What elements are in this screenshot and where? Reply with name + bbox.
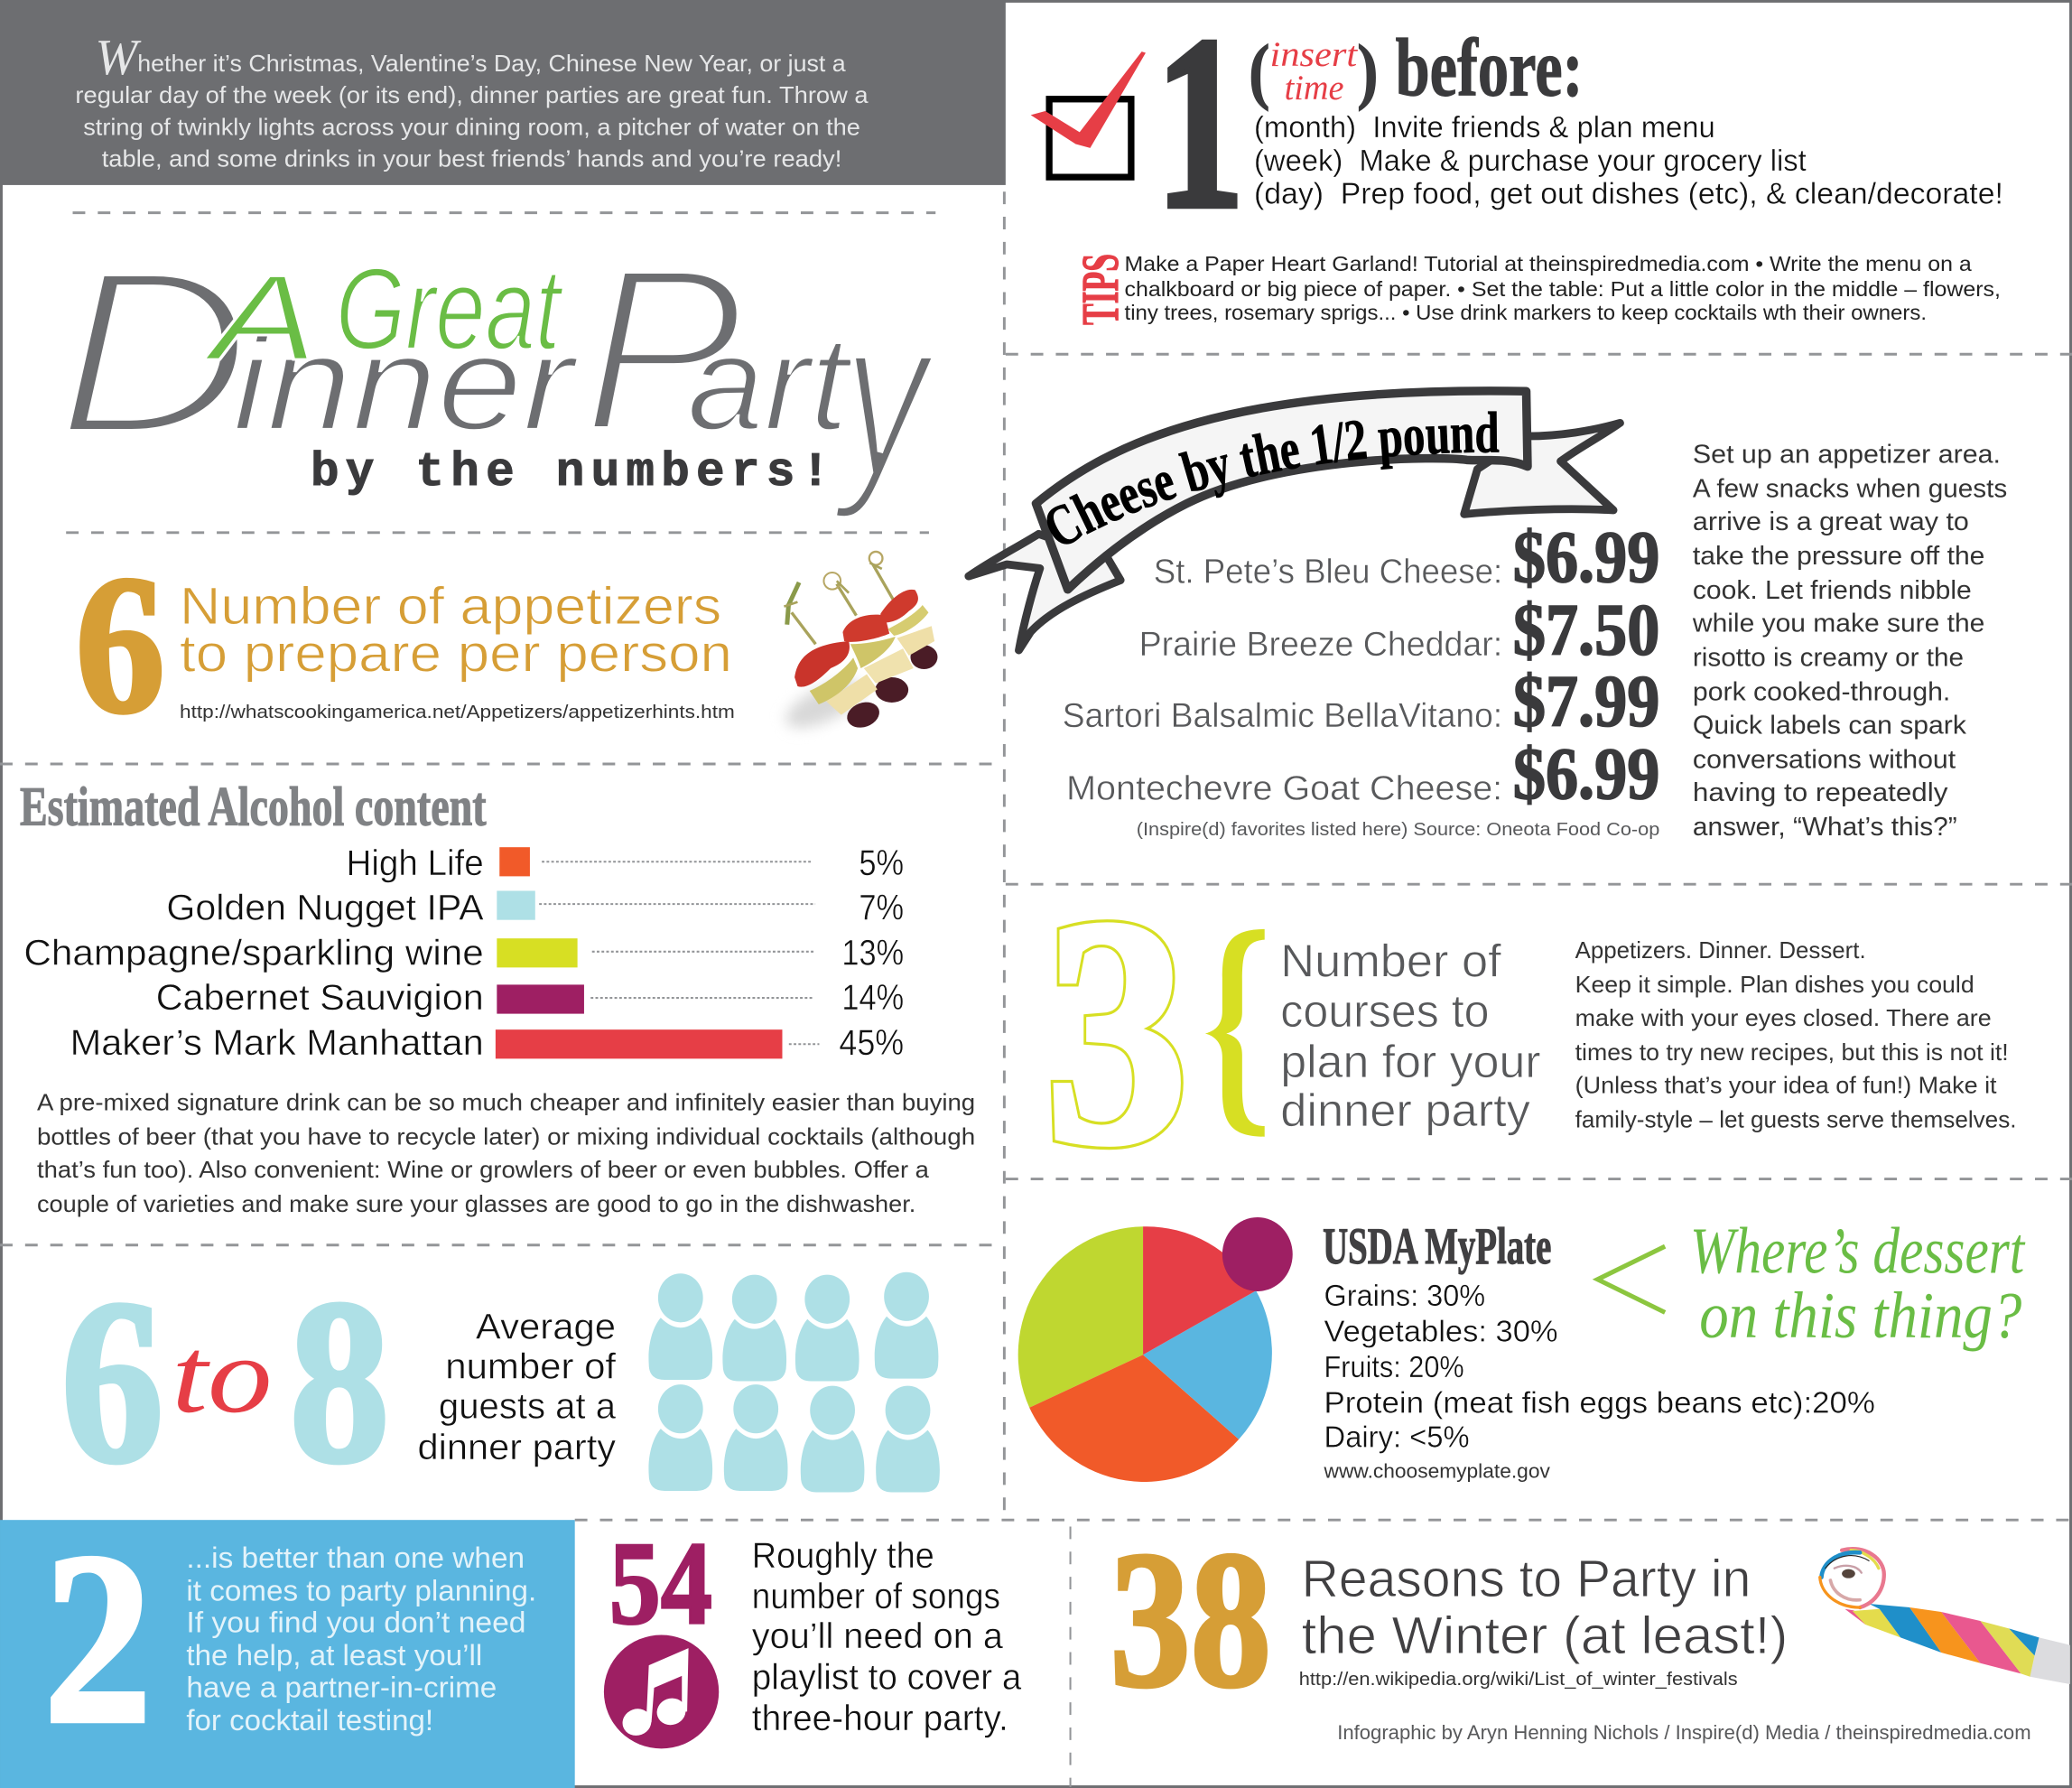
chart: estimated alcohol content: Cabernet Sauvigion (156, 978, 484, 1018)
panel: tips (1071, 252, 2001, 325)
panel: timeline: ( (1249, 29, 1270, 111)
stat: 6 to 8 guests: Average (476, 1308, 616, 1347)
stat: 3 courses: Number of (1280, 936, 1501, 987)
stat: 3 courses: 3 (1045, 851, 1188, 1211)
icon: checkbox (1031, 51, 1146, 177)
title: by the numbers! (311, 445, 830, 499)
text: appetizer area (1692, 440, 2007, 842)
list: cheese prices: St. Pete’s Bleu Cheese: (1154, 553, 1502, 591)
panel: 2 is better than one: ...is better than one when (186, 1541, 525, 1574)
panel: timeline: ) (1357, 29, 1379, 111)
stat: 38 reasons: Reasons to Party in (1302, 1550, 1751, 1608)
panel: myplate text: Vegetables: 30% (1324, 1316, 1558, 1349)
panel: tips: chalkboard or big piece of paper. • Set the table: Put a little color in the middle – flowers, (1125, 277, 2001, 301)
stat: 38 reasons (1110, 1511, 1788, 1727)
text: appetizer area: answer, “What’s this?” (1693, 813, 1957, 842)
text: appetizer area: Quick labels can spark (1693, 711, 1967, 740)
chart: estimated alcohol content: Champagne/sparkling wine (23, 933, 484, 973)
stat: 6 to 8 guests: 8 (290, 1252, 390, 1512)
title: A (203, 249, 317, 386)
stat: 3 courses: 3 (1045, 851, 1188, 1211)
stat: 38 reasons: http://en.wikipedia.org/wiki/List_of_winter_festivals (1299, 1669, 1738, 1690)
chart: estimated alcohol content: Maker’s Mark Manhattan (70, 1023, 484, 1063)
list: cheese prices: $7.99 (1513, 660, 1659, 742)
panel: tips: tiny trees, rosemary sprigs... • Use drink markers to keep cocktails wth their owners. (1125, 301, 1927, 324)
stat: 6 to 8 guests: dinner party (418, 1428, 616, 1467)
text: appetizer area: conversations without (1693, 745, 1956, 774)
list: cheese prices: $6.99 (1513, 732, 1659, 815)
panel: intro (0, 0, 1006, 185)
panel: 2 is better than one: the help, at least you’ll (186, 1639, 482, 1672)
banner: cheese by the 1/2 pound: Cheese by the 1/2 pound (1047, 411, 1499, 545)
text: appetizer area: having to repeatedly (1693, 778, 1948, 807)
text: appetizer area: pork cooked-through. (1693, 678, 1950, 707)
chart: estimated alcohol content: 7% (859, 889, 904, 928)
chart: estimated alcohol content (20, 776, 904, 1063)
text: appetizer area: arrive is a great way to (1693, 508, 1969, 536)
stat: 6 to 8 guests: number of (445, 1347, 617, 1387)
panel: intro: W (95, 30, 142, 86)
panel: timeline: time (1285, 68, 1344, 107)
stat: 6 to 8 guests: guests at a (439, 1386, 616, 1426)
text: keep it simple: Appetizers. Dinner. Dessert. (1575, 936, 1866, 964)
title: y (833, 270, 936, 521)
chart: estimated alcohol content: 45% (839, 1023, 904, 1063)
list: cheese prices: (Inspire(d) favorites listed here) Source: Oneota Food Co-op (1137, 819, 1659, 840)
text: keep it simple: make with your eyes closed. There are (1575, 1004, 1992, 1031)
banner: cheese by the 1/2 pound (964, 386, 1624, 654)
chart: estimated alcohol content: Golden Nugget IPA (166, 889, 484, 928)
stat: 3 courses: plan for your (1280, 1036, 1541, 1087)
panel: 2 is better than one: 2 (43, 1502, 152, 1774)
panel: timeline: (day) Prep food, get out dishes (etc), & clean/decorate! (1254, 177, 2003, 210)
panel: 2 is better than one: for cocktail testing! (186, 1704, 433, 1737)
panel: intro: table, and some drinks in your best friends’ hands and you’re ready! (102, 144, 841, 172)
panel: timeline: before: (1396, 22, 1583, 113)
panel: myplate text: Dairy: <5% (1324, 1421, 1470, 1455)
text: appetizer area: risotto is creamy or the (1693, 644, 1964, 673)
icon: party blower (1820, 1549, 2070, 1684)
stat: 6 to 8 guests: to (172, 1315, 273, 1435)
text: credit: Infographic by Aryn Henning Nichols / Inspire(d) Media / theinspiredmedia.com (1337, 1721, 2031, 1744)
panel: timeline: (month) Invite friends & plan menu (1254, 111, 1715, 144)
panel: 2 is better than one (0, 1502, 575, 1788)
text: keep it simple: family-style – let guests serve themselves. (1575, 1105, 2017, 1132)
stat: appetizers: to prepare per person (180, 625, 732, 684)
panel: 2 is better than one: have a partner-in-crime (186, 1671, 497, 1703)
list: cheese prices: Prairie Breeze Cheddar: (1139, 626, 1502, 664)
title: inner (233, 308, 579, 459)
icon: brace (1205, 929, 1265, 1137)
stat: 54 songs: 54 (609, 1518, 712, 1649)
text: signature drink: couple of varieties and make sure your glasses are good to go in the dishwasher. (37, 1190, 915, 1217)
list: cheese prices: $6.99 (1513, 516, 1659, 598)
list: cheese prices (1063, 516, 1659, 840)
chart: estimated alcohol content: 13% (841, 933, 904, 973)
arrow: chevron to callout (1598, 1246, 1665, 1312)
chart: myplate pie (1018, 1217, 1293, 1482)
panel: tips: TIPS (1071, 254, 1129, 325)
panel: myplate text (1323, 1218, 1875, 1482)
stat: 38 reasons: the Winter (at least!) (1302, 1606, 1788, 1665)
panel: 2 is better than one: If you find you don’t need (186, 1606, 526, 1639)
stat: 54 songs: number of songs (752, 1577, 1000, 1616)
icon: appetizer skewer (779, 552, 937, 737)
panel: myplate text: Grains: 30% (1324, 1280, 1485, 1313)
stat: 6 to 8 guests (60, 1252, 617, 1512)
text: signature drink: that’s fun too). Also convenient: Wine or growlers of beer or even bubbles. Offer a (37, 1156, 929, 1183)
stat: 54 songs: three-hour party. (752, 1699, 1008, 1738)
text: keep it simple: times to try new recipes, but this is not it! (1575, 1038, 2009, 1066)
title: P (581, 219, 744, 481)
heading: alcohol: Estimated Alcohol content (20, 776, 487, 837)
list: cheese prices: Montechevre Goat Cheese: (1066, 769, 1502, 807)
text: signature drink: A pre-mixed signature drink can be so much cheaper and infinitely easier than buying (37, 1088, 975, 1115)
stat: 54 songs: playlist to cover a (752, 1658, 1021, 1698)
stat: 54 songs: Roughly the (752, 1536, 934, 1576)
chart: estimated alcohol content: High Life (346, 843, 484, 883)
panel: myplate text: Protein (meat fish eggs beans etc):20% (1324, 1387, 1875, 1420)
stat: 38 reasons: 38 (1110, 1511, 1271, 1727)
title: Great (336, 244, 564, 374)
icon: music note (604, 1635, 719, 1748)
callout: where's dessert: on this thing? (1699, 1279, 2021, 1352)
text: appetizer area: take the pressure off the (1693, 542, 1984, 571)
text: keep it simple (1575, 936, 2017, 1132)
text: keep it simple: Keep it simple. Plan dishes you could (1575, 971, 1974, 998)
panel: intro: regular day of the week (or its end), dinner parties are great fun. Throw a (75, 81, 869, 108)
chart: estimated alcohol content: 5% (859, 843, 904, 883)
panel: myplate text: Fruits: 20% (1324, 1351, 1464, 1384)
stat: appetizers: 6 (75, 535, 165, 754)
text: appetizer area: while you make sure the (1692, 610, 1984, 638)
text: appetizer area: A few snacks when guests (1693, 474, 2007, 503)
text: keep it simple: (Unless that’s your idea of fun!) Make it (1575, 1071, 1997, 1098)
stat: 3 courses (1045, 851, 1541, 1211)
stat: appetizers: http://whatscookingamerica.net/Appetizers/appetizerhints.htm (180, 702, 735, 722)
title: art (687, 308, 853, 459)
panel: timeline: (week) Make & purchase your grocery list (1254, 144, 1807, 178)
stat: appetizers (75, 535, 735, 754)
stat: appetizers: Number of appetizers (180, 577, 721, 636)
stat: 3 courses: dinner party (1280, 1085, 1530, 1136)
icon: guests (648, 1272, 940, 1492)
text: signature drink: bottles of beer (that you have to recycle later) or mixing individual cocktails (although (37, 1123, 975, 1150)
callout: where's dessert (1690, 1214, 2026, 1352)
panel: timeline: insert (1270, 34, 1358, 74)
panel: timeline (1155, 0, 2003, 260)
stat: 54 songs (609, 1518, 1021, 1738)
title: D (55, 221, 251, 484)
stat: 6 to 8 guests: 6 (60, 1252, 164, 1512)
text: appetizer area: Set up an appetizer area. (1693, 440, 2001, 469)
stat: 3 courses: courses to (1280, 985, 1490, 1037)
list: cheese prices: $7.50 (1513, 588, 1659, 670)
panel: myplate text: www.choosemyplate.gov (1324, 1459, 1550, 1482)
chart: estimated alcohol content: 14% (841, 978, 904, 1018)
list: cheese prices: Sartori Balsalmic BellaVitano: (1063, 697, 1502, 735)
title (55, 219, 936, 521)
panel: intro: hether it’s Christmas, Valentine’s Day, Chinese New Year, or just a (137, 50, 846, 77)
text: signature drink (37, 1088, 975, 1217)
panel: tips: Make a Paper Heart Garland! Tutorial at theinspiredmedia.com • Write the menu on a (1125, 252, 1972, 275)
panel: intro: string of twinkly lights across your dining room, a pitcher of water on the (83, 113, 860, 140)
panel: 2 is better than one: it comes to party planning. (186, 1574, 536, 1606)
text: appetizer area: cook. Let friends nibble (1693, 576, 1972, 605)
stat: 54 songs: you’ll need on a (752, 1616, 1003, 1656)
panel: myplate text: USDA MyPlate (1323, 1218, 1551, 1275)
